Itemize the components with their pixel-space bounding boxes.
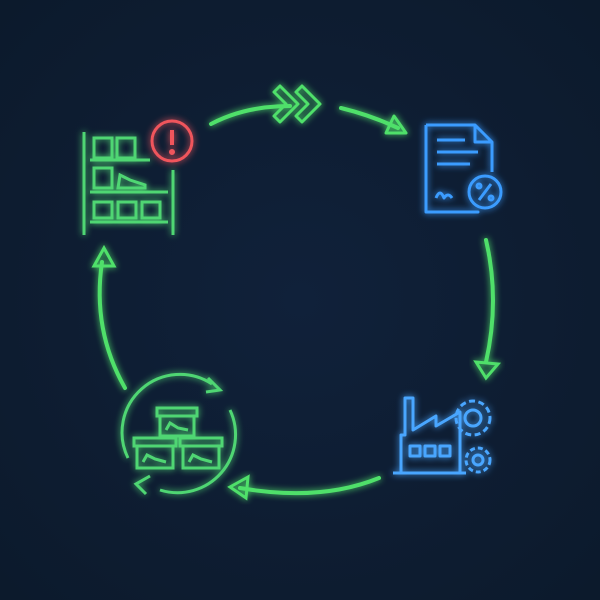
icon: shoe boxes in cycle — [122, 374, 236, 494]
icon: alert badge — [152, 121, 192, 161]
icon: factory with gears — [393, 398, 490, 473]
icon: shelf with alert — [84, 121, 192, 235]
arrow: right arc — [476, 240, 498, 378]
arrow: bottom arc — [230, 477, 379, 498]
arrow: left arc — [94, 248, 125, 388]
icon: document with percent — [426, 125, 501, 212]
arrow: top arc with chevrons — [211, 86, 406, 133]
